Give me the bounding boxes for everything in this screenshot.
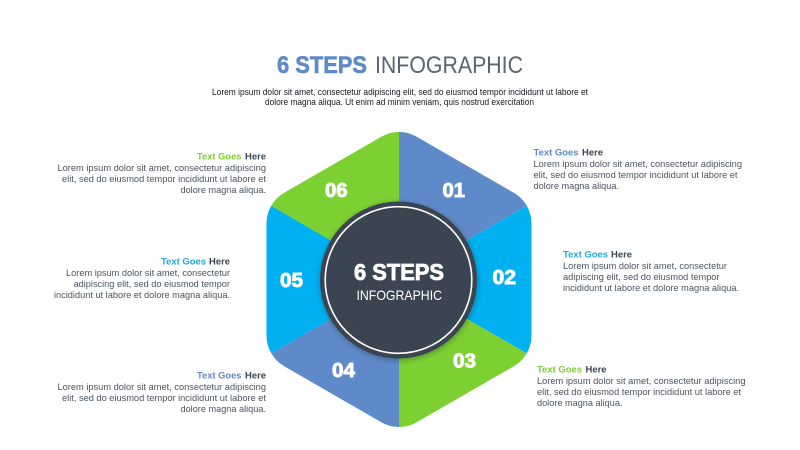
text block 02 <box>563 250 739 293</box>
text block 06: Lorem ipsum dolor sit amet, consectetur adipiscing <box>58 163 266 173</box>
text block 04: Here <box>245 370 266 380</box>
text block 03: Here <box>586 364 606 374</box>
number 02: 02 <box>492 267 516 289</box>
text block 05: Here <box>209 256 230 266</box>
text block 03: elit, sed do eiusmod tempor incididunt ut labore et <box>537 387 741 397</box>
text block 04: dolore magna aliqua. <box>180 404 266 414</box>
text block 01: elit, sed do eiusmod tempor incididunt ut labore et <box>534 170 738 180</box>
center subheading: INFOGRAPHIC <box>356 288 442 303</box>
segment 05 <box>266 206 399 353</box>
text block 03 <box>537 364 746 408</box>
text block 03: Lorem ipsum dolor sit amet, consectetur adipiscing <box>537 376 746 386</box>
number 05: 05 <box>280 270 303 292</box>
title: 6 STEPS <box>277 52 367 79</box>
title: INFOGRAPHIC <box>375 52 523 79</box>
number 01: 01 <box>442 180 465 202</box>
text block 06: Text Goes <box>197 152 242 162</box>
text block 01: dolore magna aliqua. <box>534 181 619 191</box>
subtitle text: dolore magna aliqua. Ut enim ad minim veniam, quis nostrud exercitation <box>265 97 534 107</box>
text block 04 <box>58 370 266 414</box>
segment 03 <box>399 280 527 427</box>
segment 04 <box>271 280 399 427</box>
text block 05 <box>54 256 230 300</box>
number 04: 04 <box>332 360 356 382</box>
text block 05: adipiscing elit, sed do eiusmod tempor <box>74 279 230 289</box>
text block 04: elit, sed do eiusmod tempor incididunt ut labore et <box>62 393 266 403</box>
title <box>277 52 523 79</box>
text block 01 <box>534 148 742 191</box>
segment 01 <box>399 132 527 280</box>
text block 03: Text Goes <box>537 364 582 374</box>
subtitle text: Lorem ipsum dolor sit amet, consectetur adipiscing elit, sed do eiusmod tempor incididunt ut labore et <box>212 87 588 97</box>
center heading: 6 STEPS <box>354 259 444 285</box>
text block 06: Here <box>245 152 266 162</box>
text block 05: Lorem ipsum dolor sit amet, consectetur <box>66 268 230 278</box>
text block 02: incididunt ut labore et dolore magna aliqua. <box>563 283 739 293</box>
segment 06 <box>271 132 399 280</box>
text block 01: Text Goes <box>534 148 578 158</box>
text block 03: dolore magna aliqua. <box>537 398 622 408</box>
text block 02: Here <box>611 250 632 260</box>
text block 02: Lorem ipsum dolor sit amet, consectetur <box>563 261 727 271</box>
segment 02 <box>399 206 532 353</box>
text block 05: Text Goes <box>161 256 206 266</box>
text block 06: elit, sed do eiusmod tempor incididunt ut labore et <box>62 174 266 184</box>
subtitle text <box>212 87 588 107</box>
text block 06 <box>58 152 266 195</box>
center circle <box>320 202 478 361</box>
text block 02: adipiscing elit, sed do eiusmod tempor <box>563 272 720 282</box>
text block 04: Text Goes <box>197 370 242 380</box>
text block 06: dolore magna aliqua. <box>180 185 266 195</box>
text block 02: Text Goes <box>563 250 608 260</box>
number 03: 03 <box>453 350 476 372</box>
number 06: 06 <box>325 180 348 202</box>
text block 01: Here <box>582 148 603 158</box>
text block 05: incididunt ut labore et dolore magna aliqua. <box>54 290 230 300</box>
hexagon diagram <box>266 132 532 427</box>
text block 01: Lorem ipsum dolor sit amet, consectetur adipiscing <box>534 159 742 169</box>
text block 04: Lorem ipsum dolor sit amet, consectetur adipiscing <box>58 382 266 392</box>
